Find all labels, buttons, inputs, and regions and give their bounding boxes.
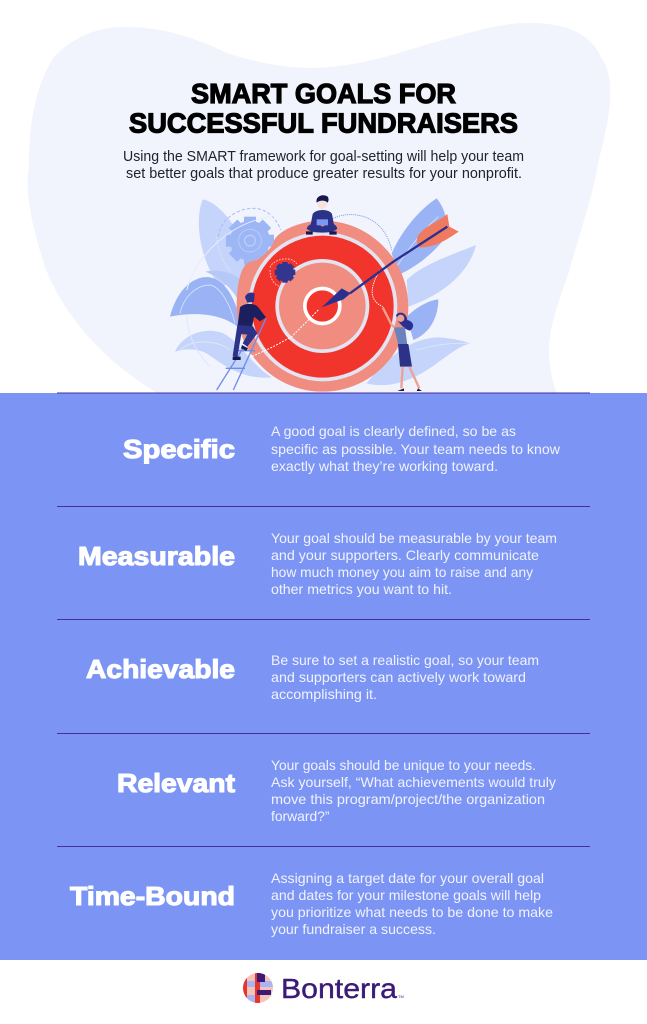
small gear — [270, 259, 297, 287]
large gear — [226, 217, 274, 265]
blue panel — [0, 393, 647, 960]
subtitle: set better goals that produce greater results for your nonprofit. — [126, 166, 522, 182]
row: Measurable: other metrics you want to hit. — [271, 581, 452, 597]
row: Time-Bound — [57, 846, 590, 937]
subtitle: Using the SMART framework for goal-setting will help your team — [123, 149, 524, 165]
row: Time-Bound: Time-Bound — [70, 881, 235, 911]
logo: Bonterra — [281, 973, 397, 1004]
row: Relevant: Your goals should be unique to your needs. — [271, 757, 536, 773]
arrow — [322, 214, 459, 307]
dashed orbits — [187, 208, 392, 367]
row: Measurable — [57, 506, 590, 597]
background blob — [28, 23, 610, 393]
title: SMART GOALS FOR — [191, 78, 456, 109]
title — [129, 78, 518, 138]
leaves — [170, 198, 476, 385]
row: Time-Bound: Assigning a target date for your overall goal — [271, 870, 544, 886]
row: Achievable: and supporters can actively work toward — [271, 669, 526, 685]
row: Measurable: Your goal should be measurable by your team — [271, 530, 557, 546]
row: Time-Bound: your fundraiser a success. — [271, 921, 436, 937]
row: Achievable: Be sure to set a realistic goal, so your team — [271, 652, 539, 668]
row: Relevant — [57, 734, 590, 824]
person: seated with laptop — [306, 195, 337, 235]
row: Relevant: forward?” — [271, 808, 330, 824]
person: pointing woman — [383, 307, 422, 391]
row: Time-Bound: and dates for your milestone goals will help — [271, 887, 541, 903]
target — [237, 221, 408, 392]
row: Specific: specific as possible. Your team needs to know — [271, 441, 561, 457]
row: Time-Bound: you prioritize what needs to be done to make — [271, 904, 553, 920]
row: Achievable — [57, 620, 590, 702]
row: Relevant: Relevant — [117, 768, 235, 798]
row: Specific: exactly what they’re working toward. — [271, 458, 498, 474]
row: Relevant: move this program/project/the organization — [271, 791, 545, 807]
illustration: target with people — [170, 195, 476, 392]
row: Achievable: Achievable — [86, 654, 235, 684]
person: climbing ladder — [217, 292, 266, 390]
row: Specific — [57, 393, 590, 474]
row: Measurable: how much money you aim to raise and any — [271, 564, 533, 580]
logo: TM — [398, 994, 404, 999]
row: Measurable: Measurable — [78, 541, 235, 571]
row: Relevant: Ask yourself, “What achievements would truly — [271, 774, 556, 790]
subtitle — [123, 149, 524, 182]
row: Specific: A good goal is clearly defined, so be as — [271, 423, 516, 439]
row: Specific: Specific — [123, 434, 235, 464]
row: Measurable: and your supporters. Clearly communicate — [271, 547, 539, 563]
row: Achievable: accomplishing it. — [271, 686, 377, 702]
logo — [243, 973, 404, 1004]
title: SUCCESSFUL FUNDRAISERS — [129, 108, 518, 138]
